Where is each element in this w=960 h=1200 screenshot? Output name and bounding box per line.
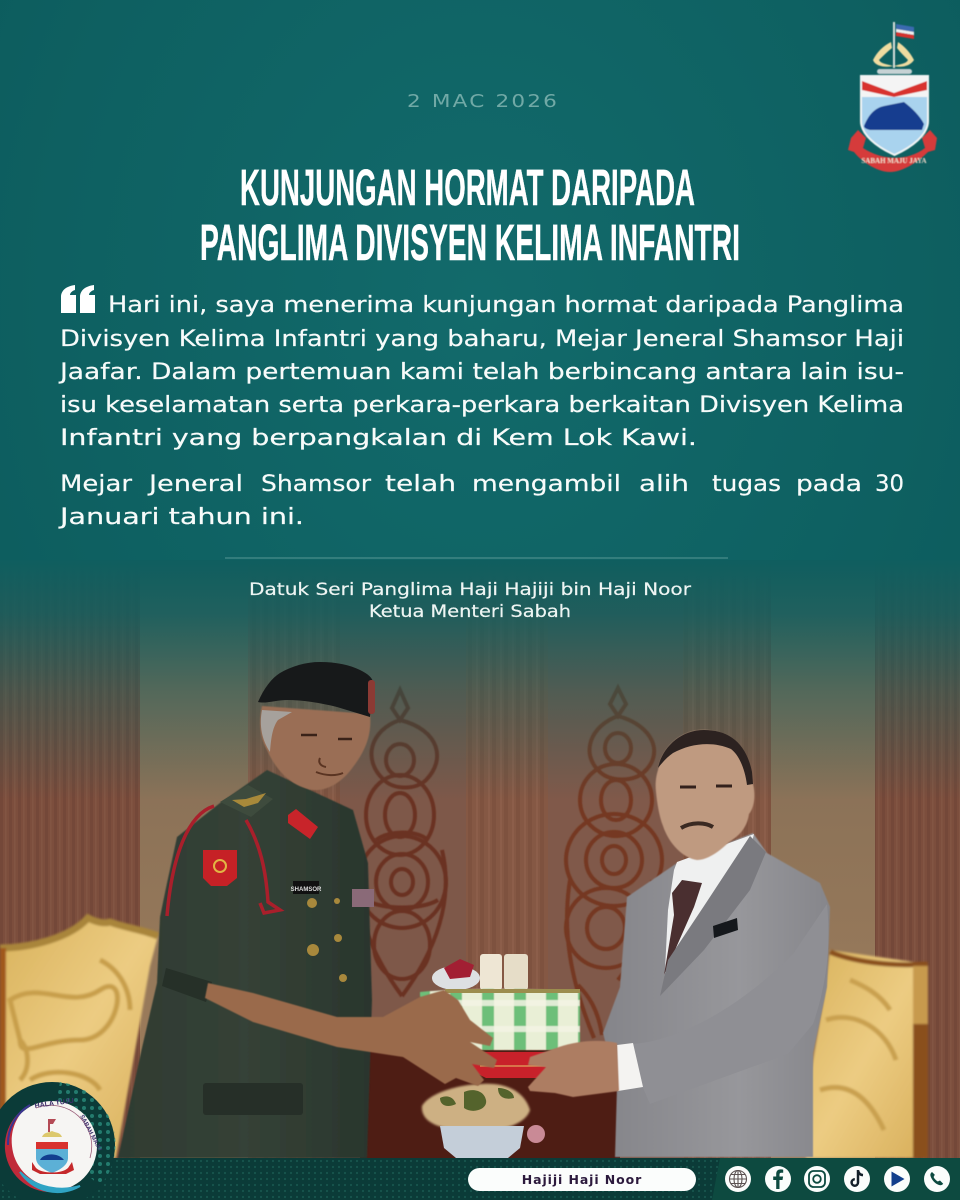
shirt cuff bbox=[617, 1043, 643, 1091]
flowers bbox=[422, 1084, 530, 1130]
shoulder patch bbox=[203, 850, 237, 886]
left chair bbox=[0, 918, 158, 1158]
hand bbox=[528, 1041, 619, 1097]
head bbox=[260, 706, 370, 790]
body paragraph 2: Jeneral bbox=[147, 471, 243, 497]
flagpole and flag bbox=[893, 22, 914, 68]
head bbox=[656, 730, 754, 860]
necktie bbox=[664, 880, 702, 975]
body paragraph 1: Hari ini, saya menerima kunjungan hormat daripada Panglima bbox=[108, 292, 904, 318]
teal fade over photo backdrop bbox=[0, 560, 960, 800]
photo foreground: courtesy call bbox=[0, 662, 928, 1158]
hair bbox=[261, 710, 292, 752]
body paragraph 1: Infantri yang berpangkalan di Kem Lok Kawi. bbox=[60, 425, 697, 451]
epaulette bbox=[220, 785, 273, 817]
hair bbox=[658, 730, 753, 785]
green woven box bbox=[420, 989, 580, 1050]
uniform buttons bbox=[307, 898, 347, 982]
body paragraph 2 bbox=[57, 471, 904, 530]
body paragraph 2: tugas bbox=[712, 471, 781, 497]
body paragraph 2: Januari tahun ini. bbox=[57, 504, 304, 530]
body paragraph 1: isu keselamatan serta perkara-perkara berkaitan Divisyen Kelima bbox=[60, 392, 904, 418]
soldier forearm and hand bbox=[205, 983, 497, 1086]
body paragraph 2: Mejar bbox=[60, 471, 133, 497]
body paragraph 2: pada bbox=[796, 471, 862, 497]
body paragraph 2: Shamsor bbox=[261, 471, 372, 497]
sleeve shading bbox=[738, 905, 828, 1000]
shirt bbox=[664, 834, 754, 990]
body paragraph 2: alih bbox=[639, 471, 689, 497]
right chair bbox=[806, 950, 928, 1158]
scroll with motto bbox=[848, 130, 937, 172]
badge mini crest bbox=[32, 1119, 74, 1174]
body paragraph 2: 30 bbox=[875, 471, 904, 497]
beret badge bbox=[368, 680, 375, 714]
shield bbox=[861, 76, 928, 155]
footer name pill bbox=[468, 1168, 696, 1191]
footer bar bbox=[0, 1158, 960, 1200]
photo backdrop: walls and wood panels bbox=[0, 560, 960, 1160]
divider bbox=[225, 558, 728, 559]
carved ornament right bbox=[566, 688, 662, 1038]
pink flower bbox=[527, 1125, 545, 1143]
body paragraph 2: telah bbox=[385, 471, 456, 497]
attribution: Datuk Seri Panglima Haji Hajiji bin Haji Noor bbox=[249, 580, 691, 600]
icon: instagram bbox=[804, 1166, 830, 1192]
face features bbox=[680, 786, 732, 787]
flower pot bbox=[440, 1126, 524, 1158]
badge ring line bbox=[36, 1105, 92, 1158]
attribution: Ketua Menteri Sabah bbox=[369, 602, 571, 622]
red shoulder cord bbox=[167, 806, 280, 916]
carved ornament left bbox=[358, 690, 446, 996]
title bbox=[200, 159, 740, 271]
icon: facebook bbox=[765, 1166, 791, 1192]
body paragraph 1: Jaafar. Dalam pertemuan kami telah berbincang antara lain isu- bbox=[58, 359, 904, 385]
crest hands bbox=[873, 42, 914, 67]
candles bbox=[480, 954, 502, 990]
badge ring text side: SABAH MAJU bbox=[78, 1114, 102, 1152]
face features bbox=[301, 735, 352, 739]
gift box and flowers bbox=[420, 954, 580, 1158]
icon: youtube play bbox=[884, 1166, 910, 1192]
soldier: Mejar Jeneral Shamsor bbox=[118, 662, 375, 1158]
sleeve hem bbox=[162, 968, 212, 1002]
body paragraph 1: Divisyen Kelima Infantri yang baharu, Mejar Jeneral Shamsor Haji bbox=[60, 326, 904, 352]
uniform body bbox=[118, 770, 372, 1158]
soldier: Mejar Jeneral Shamsor: SHAMSOR bbox=[291, 887, 322, 893]
lapel bbox=[660, 836, 766, 996]
badge white disc bbox=[7, 1101, 97, 1191]
beret bbox=[258, 662, 373, 717]
badge colour arcs bbox=[5, 1106, 74, 1192]
suit jacket bbox=[603, 833, 830, 1157]
icon: tiktok bbox=[844, 1166, 870, 1192]
collar tab bbox=[288, 809, 318, 839]
scroll with motto: SABAH MAJU JAYA bbox=[861, 157, 927, 165]
name tag bbox=[293, 881, 319, 894]
pocket badge bbox=[713, 918, 738, 938]
lower pocket bbox=[203, 1083, 303, 1115]
ribbon bbox=[432, 966, 480, 990]
crest wreath bbox=[877, 69, 912, 74]
badge dark disc bbox=[0, 1082, 115, 1200]
badge ring text top: HALA TUJU bbox=[34, 1098, 74, 1110]
minister: Datuk Seri Hajiji bbox=[528, 730, 830, 1157]
icon: quotation mark bbox=[61, 285, 95, 313]
body paragraph 2: mengambil bbox=[472, 471, 621, 497]
badge: Hala Tuju Sabah Maju Jaya bbox=[0, 1082, 116, 1200]
footer name pill: Hajiji Haji Noor bbox=[522, 1172, 642, 1187]
red tray bbox=[472, 1052, 546, 1078]
icon: phone bbox=[924, 1166, 950, 1192]
icon: website globe bbox=[725, 1166, 751, 1192]
medal ribbon bbox=[352, 889, 374, 907]
body paragraph 1 bbox=[58, 292, 904, 451]
badge dotted ring bbox=[56, 1082, 116, 1186]
attribution bbox=[249, 580, 691, 622]
date: 2 MAC 2026 bbox=[407, 91, 559, 112]
icon: Sabah coat of arms bbox=[848, 22, 937, 172]
